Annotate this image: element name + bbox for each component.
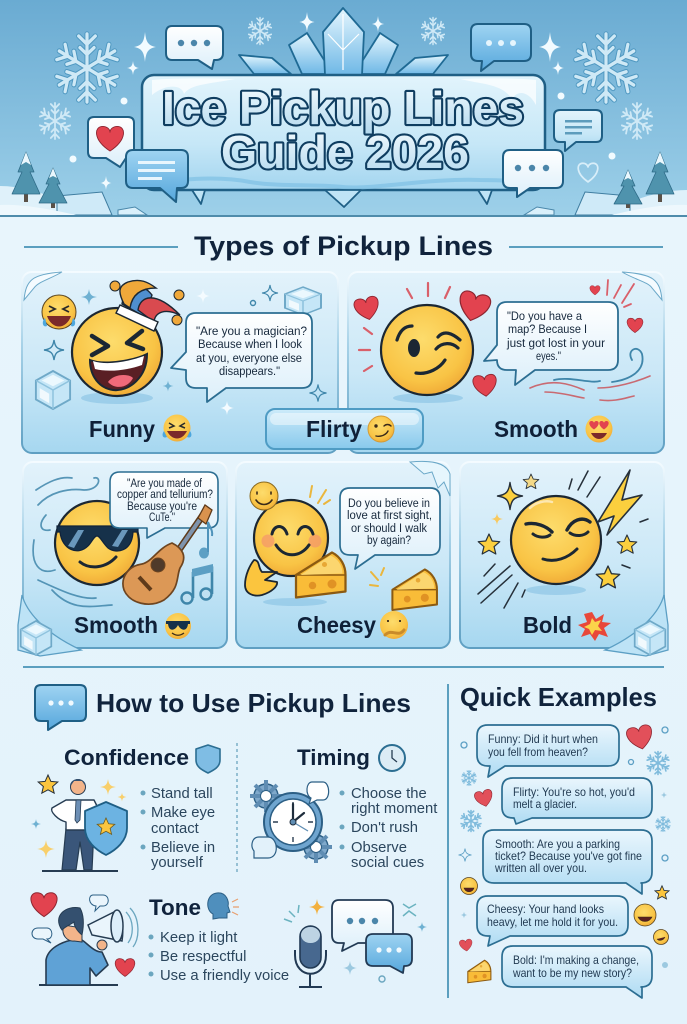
bubble: smooth example	[483, 830, 652, 894]
speech bubble: funny: "Are you a magician?	[196, 324, 307, 338]
bullet list	[340, 786, 437, 871]
bullet list: Believe in	[151, 840, 215, 856]
bullet list: yourself	[151, 855, 204, 871]
speech bubble: smooth: Because you're	[127, 499, 197, 513]
panel: cheesy	[236, 461, 450, 648]
label: cheesy	[297, 611, 408, 639]
bullet list: Be respectful	[160, 949, 246, 965]
icon: laughing jester face	[72, 280, 184, 404]
speech bubble: funny: at you, everyone else	[196, 351, 302, 365]
icon: small laughing emoji	[42, 295, 76, 329]
label: smooth sunglasses: Smooth	[74, 612, 158, 638]
block: timing	[250, 745, 437, 871]
speech bubble: funny: Because when I look	[198, 337, 303, 351]
bullet list: Observe	[351, 840, 407, 856]
speech bubble: flirty: map? Because I	[508, 322, 587, 336]
label: bold: Bold	[523, 612, 572, 638]
heading: types of pickup lines: Types of Pickup Lines	[194, 231, 493, 261]
label: smooth	[494, 416, 612, 442]
block: tone	[31, 893, 289, 985]
label: bold	[523, 612, 611, 641]
bubble: cheesy example: heavy, let me hold it for you.	[487, 915, 618, 929]
label: cheesy: Cheesy	[297, 612, 376, 638]
label: funny: Funny	[89, 416, 155, 442]
bullet list: right moment	[351, 801, 437, 817]
speech bubble: smooth: copper and tellurium?	[117, 487, 213, 501]
icon: guitar and music notes	[123, 505, 213, 604]
bullet list	[140, 786, 215, 871]
decorations: hearts, snowflakes, emoji	[458, 724, 670, 983]
badge: flirty	[266, 409, 423, 449]
icons: stars and energy lines	[478, 471, 648, 608]
snow hills and trees	[0, 152, 687, 215]
speech bubble: smooth: "Are you made of	[127, 476, 202, 490]
heading: How to Use Pickup Lines	[96, 688, 411, 718]
icon: sunglasses face	[55, 501, 139, 585]
icon: lightning bolt	[598, 470, 642, 535]
bullet list: Stand tall	[151, 786, 213, 802]
speech bubble: flirty: just got lost in your	[506, 336, 605, 350]
header banner	[0, 0, 687, 217]
bubble: smooth example: ticket? Because you've got fine	[495, 849, 642, 863]
panel: smooth	[23, 462, 227, 648]
icons: hearts and rays	[353, 280, 650, 401]
panel: flirty	[348, 272, 664, 453]
bullet list	[148, 930, 289, 984]
bubble: bold example: Bold: I'm making a change,	[513, 953, 639, 967]
block: tone: Tone	[149, 895, 201, 920]
title text	[162, 82, 524, 178]
speech bubble: funny	[171, 313, 312, 402]
bubble: flirty example	[502, 778, 652, 824]
section: how to use pickup lines	[31, 685, 437, 987]
section: quick examples	[458, 682, 670, 998]
bullet list: Use a friendly voice	[160, 968, 289, 984]
speech bubble: smooth	[110, 472, 218, 538]
icon: man with shield	[31, 775, 127, 871]
header chat bubbles	[88, 24, 602, 202]
speech bubble: cheesy: by again?	[367, 533, 411, 547]
icon: man with megaphone	[31, 893, 138, 985]
speech bubble: cheesy: Do you believe in	[348, 496, 430, 510]
speech bubble: flirty: "Do you have a	[507, 309, 582, 323]
speech bubble: funny: disappears."	[219, 364, 280, 378]
icon: microphone and chat bubbles	[284, 899, 427, 987]
speech bubble: smooth: CuTe."	[149, 510, 175, 524]
ice crystals	[239, 8, 448, 75]
bullet list: Keep it light	[160, 930, 237, 946]
bubble: funny example: Funny: Did it hurt when	[488, 732, 598, 746]
speech bubble: flirty	[484, 302, 618, 385]
icon: smirking face	[511, 496, 601, 595]
bubble: bold example: want to be my new story?	[512, 966, 632, 980]
badge: flirty: Flirty	[306, 416, 362, 442]
block: confidence	[31, 745, 220, 871]
title text: Guide 2026	[221, 126, 469, 178]
bubble: funny example	[477, 725, 619, 777]
icon: chat bubble	[35, 685, 86, 730]
speech bubble: cheesy	[340, 488, 440, 569]
bubble: cheesy example	[477, 896, 628, 946]
block: confidence: Confidence	[64, 745, 189, 770]
label: smooth: Smooth	[494, 416, 578, 442]
bullet list: social cues	[351, 855, 424, 871]
bubble: flirty example: Flirty: You're so hot, you'd	[513, 785, 635, 799]
snowflakes and sparkles	[39, 12, 653, 190]
panel: bold	[460, 462, 664, 648]
bubble: flirty example: melt a glacier.	[513, 797, 577, 811]
bubble: cheesy example: Cheesy: Your hand looks	[487, 902, 604, 916]
speech bubble: flirty: eyes."	[536, 349, 561, 363]
bullet list: contact	[151, 821, 199, 837]
heading: Quick Examples	[460, 682, 657, 712]
block: timing: Timing	[297, 745, 370, 770]
panel: funny	[22, 272, 338, 453]
wind swirls	[33, 478, 112, 606]
bubble: smooth example: written all over you.	[494, 861, 587, 875]
speech bubble: cheesy: or should I walk	[351, 521, 428, 535]
icon: small smiley	[250, 482, 278, 510]
icon: clock with gears	[250, 780, 332, 863]
title plaque	[142, 75, 545, 207]
bubble: funny example: you fell from heaven?	[488, 745, 588, 759]
bubble: smooth example: Smooth: Are you a parking	[495, 837, 620, 851]
title text: Ice Pickup Lines	[162, 82, 524, 134]
speech bubble: cheesy: love at first sight,	[347, 508, 432, 522]
icon: winking face	[381, 305, 473, 403]
bullet list: Choose the	[351, 786, 427, 802]
icon: speaking head	[208, 893, 239, 919]
icons: ice cubes and sparkles	[36, 285, 327, 415]
icon: smiling face with cheese	[245, 500, 346, 606]
icon: cheese wedge	[310, 486, 437, 610]
label: funny	[89, 414, 191, 442]
bubble: bold example	[502, 946, 652, 998]
bullet list: Don't rush	[351, 820, 418, 836]
bullet list: Make eye	[151, 805, 215, 821]
icons: corner ice blocks	[18, 595, 668, 656]
